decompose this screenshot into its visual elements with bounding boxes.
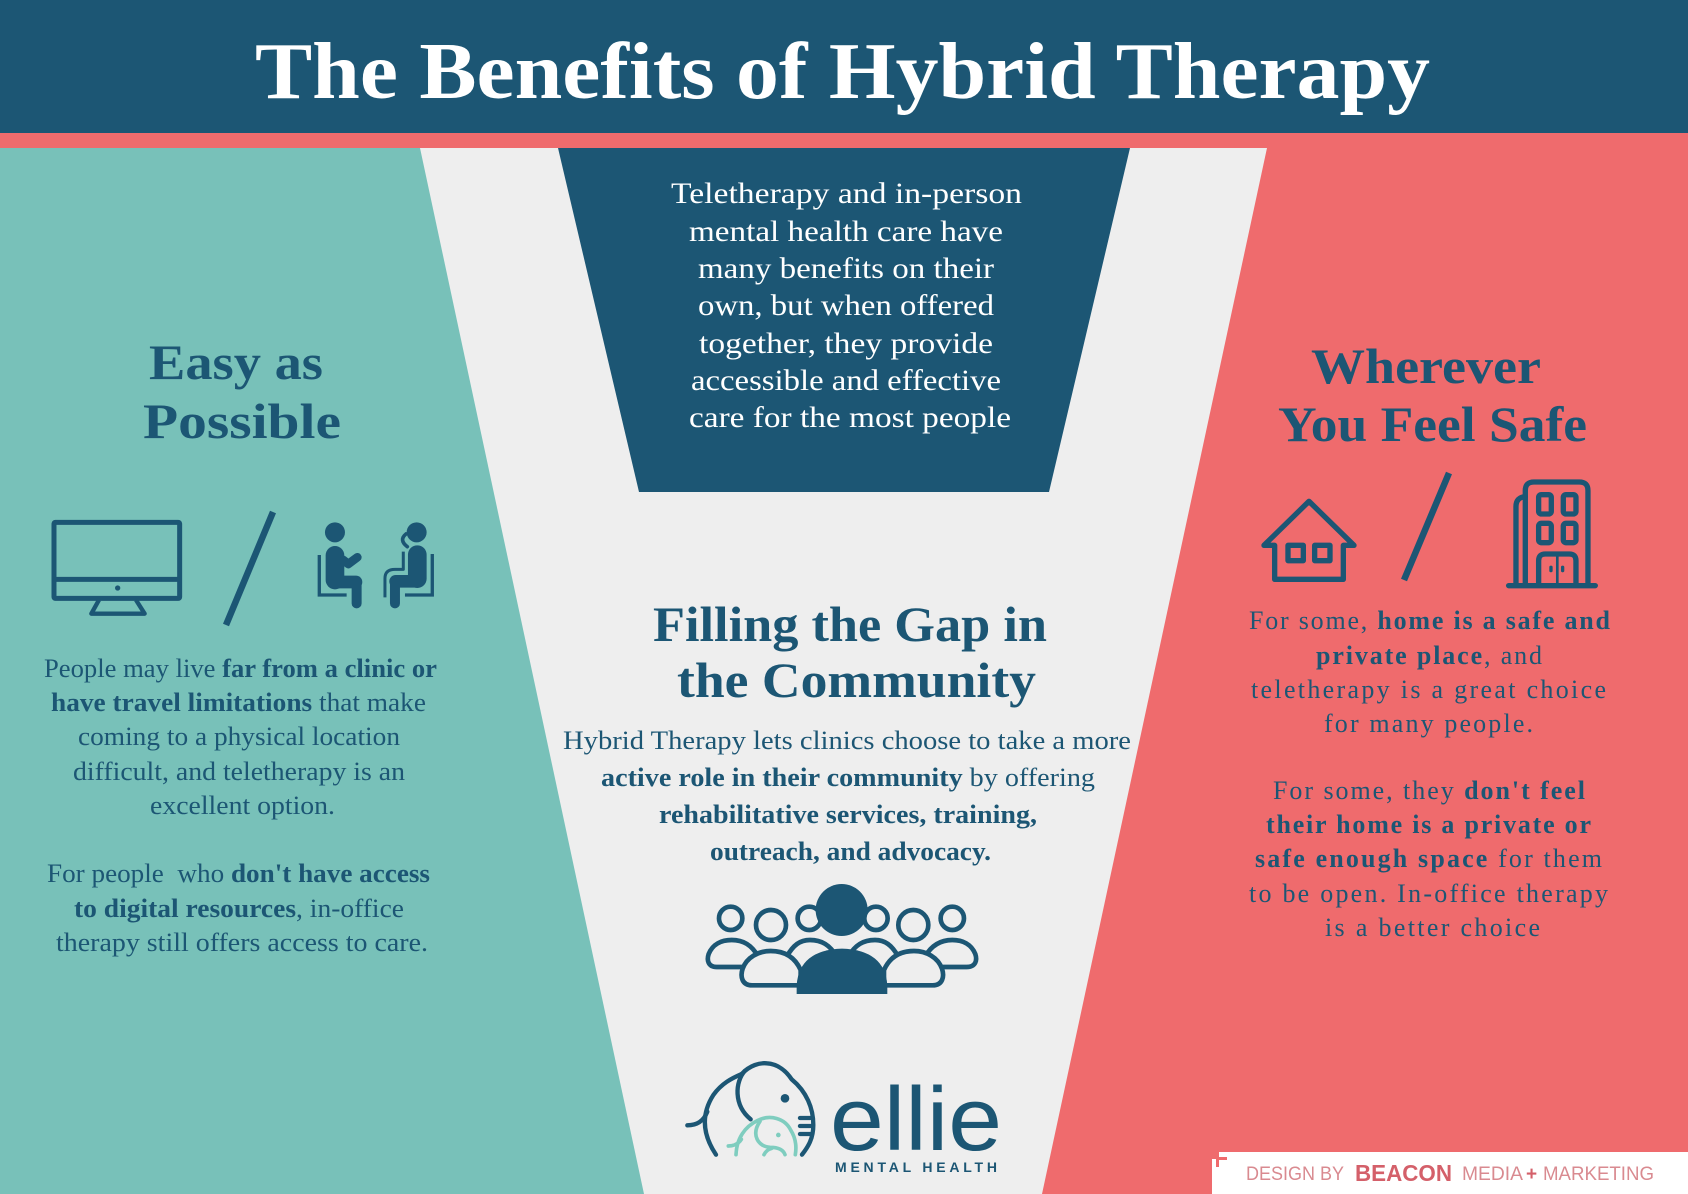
heading: easy as possible: Easy as xyxy=(149,334,323,390)
text: in-office paragraph: For some, they don't feel xyxy=(1273,776,1585,805)
text: in-office paragraph xyxy=(1249,776,1608,942)
text: in-office paragraph: their home is a private or xyxy=(1266,810,1591,839)
icon: slash divider xyxy=(1404,473,1449,580)
footer credit: MEDIA xyxy=(1462,1164,1523,1185)
text: home paragraph: teletherapy is a great choice xyxy=(1251,675,1606,704)
text: access paragraph one: coming to a physical location xyxy=(78,721,400,751)
intro text: mental health care have xyxy=(689,216,1003,248)
footer credit: BEACON xyxy=(1355,1160,1452,1186)
panel: intro trapezoid xyxy=(558,148,1130,492)
heading: easy as possible xyxy=(143,334,341,449)
text: community paragraph: active role in their community by offering xyxy=(601,762,1095,792)
heading: wherever you feel safe: You Feel Safe xyxy=(1278,396,1587,452)
text: access paragraph two: For people who don't have access xyxy=(47,858,430,888)
text: home paragraph: private place, and xyxy=(1316,641,1542,670)
panel: filling the gap xyxy=(563,596,1131,994)
header band xyxy=(0,0,1688,148)
text: community paragraph: rehabilitative services, training, xyxy=(659,799,1037,829)
heading: wherever you feel safe: Wherever xyxy=(1311,338,1541,394)
panel: easy as possible xyxy=(44,334,437,957)
footer credit: DESIGN BY xyxy=(1246,1164,1344,1185)
intro text: own, but when offered xyxy=(698,290,994,322)
panel: teal wedge background xyxy=(0,148,644,1194)
title: The Benefits of Hybrid Therapy xyxy=(255,28,1430,116)
icon: office building xyxy=(1509,482,1595,586)
wordmark: ellie: ellie xyxy=(830,1070,1002,1170)
intro text: accessible and effective xyxy=(691,365,1001,397)
heading: filling the gap in the community: Filling the Gap in xyxy=(653,596,1047,652)
text: access paragraph two: to digital resources , in-office xyxy=(74,893,404,923)
footer credit xyxy=(1212,1152,1688,1194)
heading: wherever you feel safe xyxy=(1278,338,1587,452)
panel: coral wedge background xyxy=(1042,148,1688,1194)
text: community paragraph: Hybrid Therapy lets clinics choose to take a more xyxy=(563,725,1131,755)
intro text: care for the most people xyxy=(689,402,1011,434)
text: access paragraph one xyxy=(44,653,437,820)
text: access paragraph two xyxy=(47,858,430,957)
icon: two people seated in therapy xyxy=(319,522,432,603)
text: home paragraph: for many people. xyxy=(1324,709,1533,738)
intro text: Teletherapy and in-person xyxy=(671,178,1022,210)
logo: ellie mental health xyxy=(687,1063,1002,1175)
footer credit: + xyxy=(1526,1164,1537,1185)
text: home paragraph: For some, home is a safe and xyxy=(1249,606,1611,635)
text: access paragraph one: People may live far from a clinic or xyxy=(44,653,437,683)
footer credit: MARKETING xyxy=(1543,1164,1654,1185)
wordmark: mental health: MENTAL HEALTH xyxy=(835,1159,997,1175)
text: access paragraph one: difficult, and teletherapy is an xyxy=(73,756,405,786)
text: in-office paragraph: is a better choice xyxy=(1325,913,1540,942)
icon: computer monitor xyxy=(54,522,180,614)
panel: wherever you feel safe xyxy=(1249,338,1611,942)
text: in-office paragraph: to be open. In-office therapy xyxy=(1249,879,1608,908)
text: community paragraph xyxy=(563,725,1131,866)
text: access paragraph two: therapy still offers access to care. xyxy=(56,927,428,957)
icon: group of people xyxy=(708,884,976,994)
icon: elephant logo xyxy=(687,1063,813,1155)
text: access paragraph one: excellent option. xyxy=(150,790,335,820)
intro text: together, they provide xyxy=(699,328,993,360)
text: in-office paragraph: safe enough space for them xyxy=(1255,844,1602,873)
heading: easy as possible: Possible xyxy=(143,393,341,449)
text: access paragraph one: have travel limitations that make xyxy=(51,687,426,717)
text: home paragraph xyxy=(1249,606,1611,738)
icon: house xyxy=(1264,501,1354,579)
heading: filling the gap in the community: the Community xyxy=(677,652,1036,708)
text: community paragraph: outreach, and advocacy. xyxy=(710,836,991,866)
heading: filling the gap in the community xyxy=(653,596,1047,708)
intro text xyxy=(671,178,1022,434)
icon: slash divider xyxy=(226,512,273,625)
intro text: many benefits on their xyxy=(698,253,994,285)
